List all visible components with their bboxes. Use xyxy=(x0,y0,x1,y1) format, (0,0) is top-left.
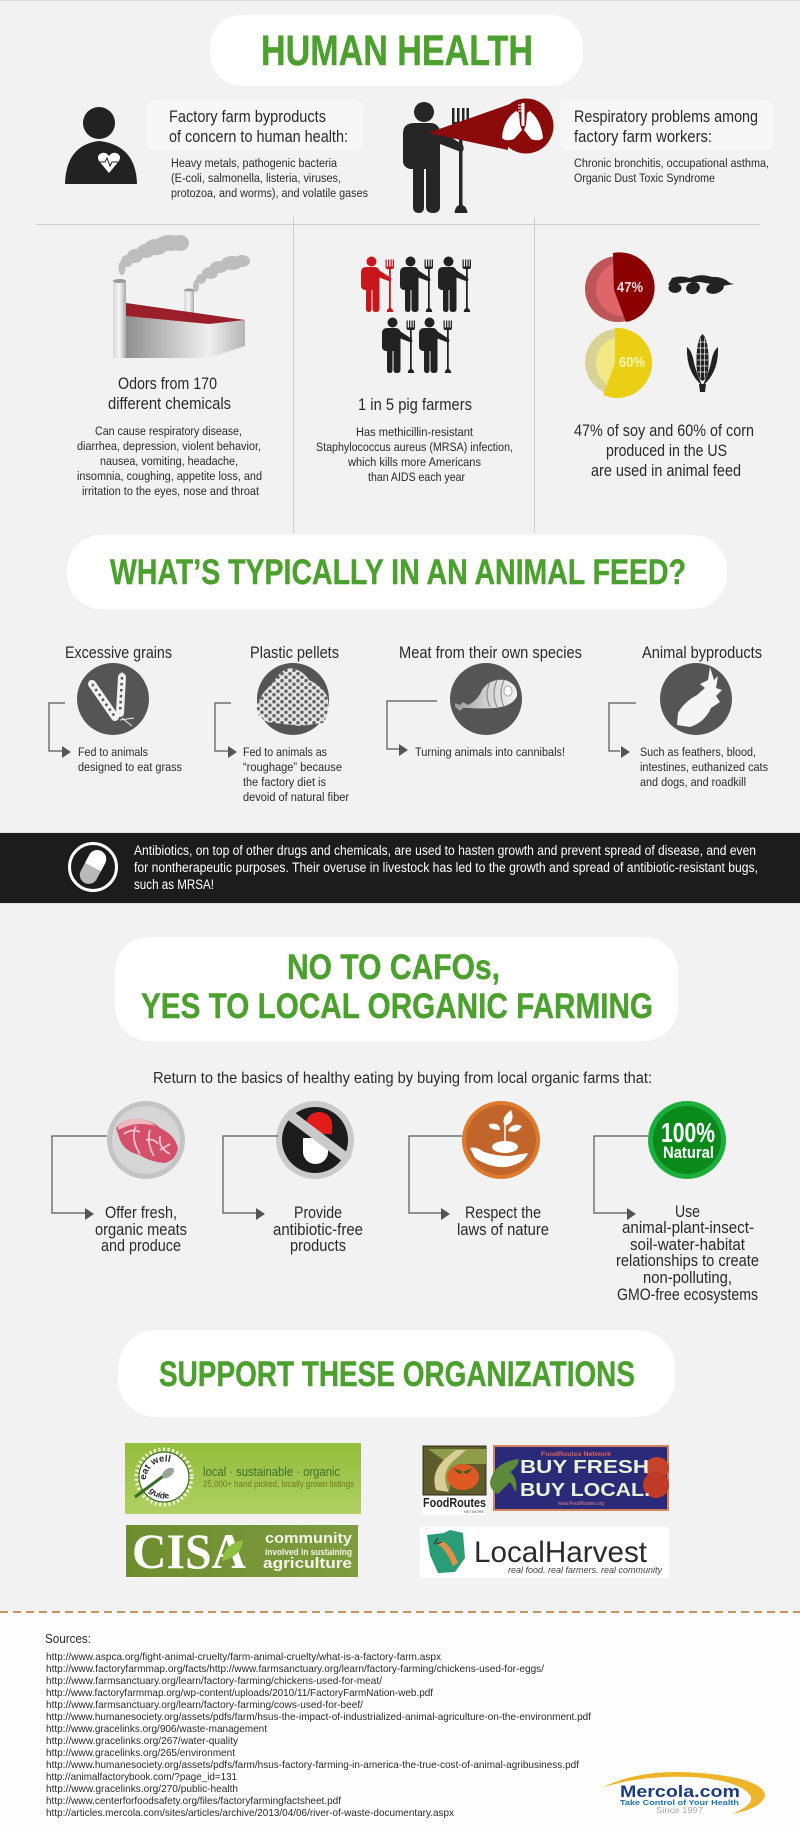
logo: buy fresh buy local xyxy=(490,1446,669,1510)
text block: pig farmers: Has methicillin-resistant xyxy=(356,425,474,439)
logo: eat well guide: eat well xyxy=(141,1454,171,1480)
benefit: 100% natural: Use xyxy=(675,1203,700,1221)
source list: http://www.factoryfarmmap.org/wp-content/uploads/2010/11/FactoryFarmNation-web.pdf xyxy=(46,1688,433,1699)
text block: odors: nausea, vomiting, headache, xyxy=(100,454,238,468)
logo: eat well guide: local · sustainable · organic xyxy=(203,1465,340,1479)
text block: factory farm byproducts: of concern to human health: xyxy=(169,128,348,146)
logo: buy fresh buy local: BUY LOCAL. xyxy=(520,1479,650,1500)
text block: respiratory problems: Respiratory problems among xyxy=(574,108,758,126)
logo: Mercola xyxy=(602,1772,765,1815)
feed item: meat from own species xyxy=(387,644,582,759)
text block: respiratory problems: factory farm workers: xyxy=(574,128,712,146)
source list: http://www.farmsanctuary.org/learn/factory-farming/chickens-used-for-meat/ xyxy=(46,1676,382,1687)
chart: corn pie 60%: 60% xyxy=(619,354,645,371)
feed item: excessive grains: designed to eat grass xyxy=(78,760,182,774)
logo: Mercola: Take Control of Your Health xyxy=(620,1800,739,1807)
benefit: antibiotic-free xyxy=(223,1101,363,1255)
feed item: animal byproducts: and dogs, and roadkill xyxy=(640,775,746,789)
heading pill: no to CAFOs xyxy=(115,937,678,1041)
text block: factory farm byproducts xyxy=(147,100,368,200)
panel: antibiotics band xyxy=(0,832,800,904)
text block: odors: irritation to the eyes, nose and throat xyxy=(82,484,260,498)
heading pill: no to CAFOs: NO TO CAFOs, xyxy=(287,948,500,987)
logo: food routes: FoodRoutes xyxy=(423,1496,486,1510)
feed item: meat from own species: Turning animals into cannibals! xyxy=(415,745,565,759)
source list: http://www.farmsanctuary.org/learn/factory-farming/cows-used-for-beef/ xyxy=(46,1700,363,1711)
logo: Mercola: Mercola.com xyxy=(620,1782,740,1801)
text block: respiratory problems: Chronic bronchitis, occupational asthma, xyxy=(574,156,769,170)
heading pill: animal feed: WHAT’S TYPICALLY IN AN ANIMAL FEED? xyxy=(110,553,686,592)
heading pill: support these organizations xyxy=(118,1330,675,1417)
logo: buy fresh buy local: FoodRoutes Network xyxy=(541,1451,611,1458)
benefit: fresh meats: organic meats xyxy=(95,1221,187,1239)
icon: worker with lungs xyxy=(403,98,554,213)
text block: antibiotics: such as MRSA! xyxy=(134,877,214,892)
logo: CISA: agriculture xyxy=(263,1555,352,1572)
logo: food routes xyxy=(422,1445,487,1515)
logo: buy fresh buy local: www.FoodRoutes.org xyxy=(558,1501,604,1507)
benefit: fresh meats xyxy=(52,1101,187,1255)
text block: odors: Can cause respiratory disease, xyxy=(95,424,242,438)
logo: CISA: community xyxy=(265,1530,353,1547)
chart: soy pie 47%: 47% xyxy=(617,279,643,296)
benefit: laws of nature: laws of nature xyxy=(457,1221,549,1239)
chart: corn pie 60% xyxy=(585,328,652,398)
text block: odors: diarrhea, depression, violent behavior, xyxy=(77,439,261,453)
benefit: 100% natural: non-polluting, xyxy=(643,1269,732,1287)
panel: no to CAFOs xyxy=(52,937,759,1304)
panel: sources footer xyxy=(0,1612,800,1835)
logo: local harvest: LocalHarvest xyxy=(474,1536,648,1569)
chart: soy pie 47% xyxy=(585,252,655,322)
feed item: animal byproducts: intestines, euthanized cats xyxy=(640,760,768,774)
logo: eat well guide: 25,000+ hand picked, locally grown listings xyxy=(203,1479,354,1489)
logo: eat well guide xyxy=(125,1443,361,1514)
source list: http://www.gracelinks.org/906/waste-management xyxy=(46,1724,267,1735)
source list: http://articles.mercola.com/sites/articles/archive/2013/04/06/river-of-waste-documentary.aspx xyxy=(46,1808,454,1819)
text block: soy and corn xyxy=(574,422,754,480)
heading pill: support these organizations: SUPPORT THESE ORGANIZATIONS xyxy=(159,1355,635,1394)
text block: respiratory problems: Organic Dust Toxic Syndrome xyxy=(574,171,715,185)
feed item: plastic pellets: “roughage” because xyxy=(243,760,342,774)
title pill: human health xyxy=(210,15,583,86)
text block: factory farm byproducts: (E-coli, salmonella, listeria, viruses, xyxy=(171,171,341,185)
feed item: plastic pellets: Fed to animals as xyxy=(243,745,327,759)
logo: buy fresh buy local: BUY FRESH xyxy=(520,1456,649,1477)
intro text: Return to the basics of healthy eating by buying from local organic farms that: xyxy=(153,1070,652,1087)
title pill: human health: HUMAN HEALTH xyxy=(261,27,533,75)
feed item: excessive grains: Excessive grains xyxy=(65,644,172,662)
benefit: 100% natural: soil-water-habitat xyxy=(630,1236,745,1254)
benefit: 100% natural xyxy=(594,1101,759,1304)
source list: http://www.gracelinks.org/267/water-quality xyxy=(46,1736,239,1747)
text block: odors: different chemicals xyxy=(108,395,231,413)
logo: CISA: CISA xyxy=(132,1523,246,1579)
text block: respiratory problems xyxy=(560,100,773,185)
logo: Mercola: Since 1997 xyxy=(656,1806,704,1815)
logo: eat well guide: guide xyxy=(148,1488,169,1499)
source list: http://www.factoryfarmmap.org/facts/http://www.farmsanctuary.org/learn/factory-farming/chickens-used-for-eggs/ xyxy=(46,1664,544,1675)
benefit: 100% natural: 100% xyxy=(661,1117,715,1148)
text block: soy and corn: are used in animal feed xyxy=(591,462,741,480)
feed item: meat from own species: Meat from their own species xyxy=(399,644,582,662)
source list: http://www.gracelinks.org/265/environment xyxy=(46,1748,235,1759)
text block: factory farm byproducts: Factory farm byproducts xyxy=(169,108,326,126)
text block: factory farm byproducts: protozoa, and worms), and volatile gases xyxy=(171,186,368,200)
panel: human health xyxy=(36,15,773,533)
benefit: fresh meats: and produce xyxy=(101,1237,181,1255)
feed item: excessive grains: Fed to animals xyxy=(78,745,148,759)
source list: http://www.aspca.org/fight-animal-cruelty/farm-animal-cruelty/what-is-a-factory-farm.aspx xyxy=(46,1652,441,1663)
benefit: fresh meats: Offer fresh, xyxy=(105,1204,177,1222)
text block: soy and corn: 47% of soy and 60% of corn xyxy=(574,422,754,440)
source list: http://www.centerforfoodsafety.org/files/factoryfarmingfactsheet.pdf xyxy=(46,1796,341,1807)
source list: http://animalfactorybook.com/?page_id=131 xyxy=(46,1772,237,1783)
panel: animal feed xyxy=(49,535,768,804)
icon: soy beans xyxy=(668,275,734,296)
logo: local harvest: real food. real farmers. real community xyxy=(508,1565,663,1576)
benefit: laws of nature xyxy=(409,1101,549,1239)
feed item: plastic pellets xyxy=(215,644,349,804)
text block: pig farmers: 1 in 5 pig farmers xyxy=(358,396,472,414)
icon: five pig farmers xyxy=(361,256,471,373)
text block: odors: Odors from 170 xyxy=(118,375,217,393)
text block: soy and corn: produced in the US xyxy=(606,442,727,460)
feed item: excessive grains xyxy=(49,644,182,774)
feed item: plastic pellets: devoid of natural fiber xyxy=(243,790,349,804)
panel: organizations xyxy=(118,1330,675,1579)
logo: food routes: NETWORK xyxy=(464,1509,484,1514)
feed item: plastic pellets: the factory diet is xyxy=(243,775,326,789)
benefit: 100% natural: Natural xyxy=(663,1143,714,1162)
source list: http://www.gracelinks.org/270/public-health xyxy=(46,1784,238,1795)
logo: CISA: involved in sustaining xyxy=(265,1547,352,1558)
source list: http://www.humanesociety.org/assets/pdfs/farm/hsus-the-impact-of-industrialized-animal-agriculture-on-the-environment.pdf xyxy=(46,1712,591,1723)
source list: http://www.humanesociety.org/assets/pdfs/farm/hsus-factory-farming-in-america-the-true-cost-of-animal-agribusiness.pdf xyxy=(46,1760,579,1771)
icon: corn xyxy=(687,334,718,392)
icon: factory with smoke xyxy=(113,235,250,358)
text block: pig farmers: than AIDS each year xyxy=(368,470,465,484)
text block: pig farmers: Staphylococcus aureus (MRSA) infection, xyxy=(316,440,513,454)
benefit: 100% natural: relationships to create xyxy=(616,1252,759,1270)
text block: antibiotics xyxy=(134,843,758,892)
benefit: 100% natural: GMO-free ecosystems xyxy=(617,1286,758,1304)
benefit: antibiotic-free: products xyxy=(290,1237,346,1255)
feed item: animal byproducts: Animal byproducts xyxy=(642,644,762,662)
benefit: 100% natural: animal-plant-insect- xyxy=(622,1219,754,1237)
logo: CISA xyxy=(126,1523,358,1579)
feed item: plastic pellets: Plastic pellets xyxy=(250,644,339,662)
text block: pig farmers: which kills more Americans xyxy=(347,455,481,469)
heading pill: no to CAFOs: YES TO LOCAL ORGANIC FARMING xyxy=(141,987,653,1026)
text block: pig farmers xyxy=(316,396,513,484)
feed item: animal byproducts: Such as feathers, blood, xyxy=(640,745,756,759)
source list xyxy=(46,1652,591,1819)
benefit: antibiotic-free: antibiotic-free xyxy=(273,1221,363,1239)
heading pill: animal feed xyxy=(67,535,727,609)
benefit: laws of nature: Respect the xyxy=(465,1204,541,1222)
text block: odors xyxy=(77,375,262,498)
logo: local harvest xyxy=(420,1527,669,1578)
text block: odors: insomnia, coughing, appetite loss, and xyxy=(77,469,262,483)
sources heading: Sources: xyxy=(45,1631,91,1646)
text block: factory farm byproducts: Heavy metals, pathogenic bacteria xyxy=(171,156,337,170)
icon: person with heart xyxy=(65,107,137,184)
feed item: animal byproducts xyxy=(609,644,768,789)
icon: pill xyxy=(70,844,116,890)
benefit: antibiotic-free: Provide xyxy=(294,1204,342,1222)
